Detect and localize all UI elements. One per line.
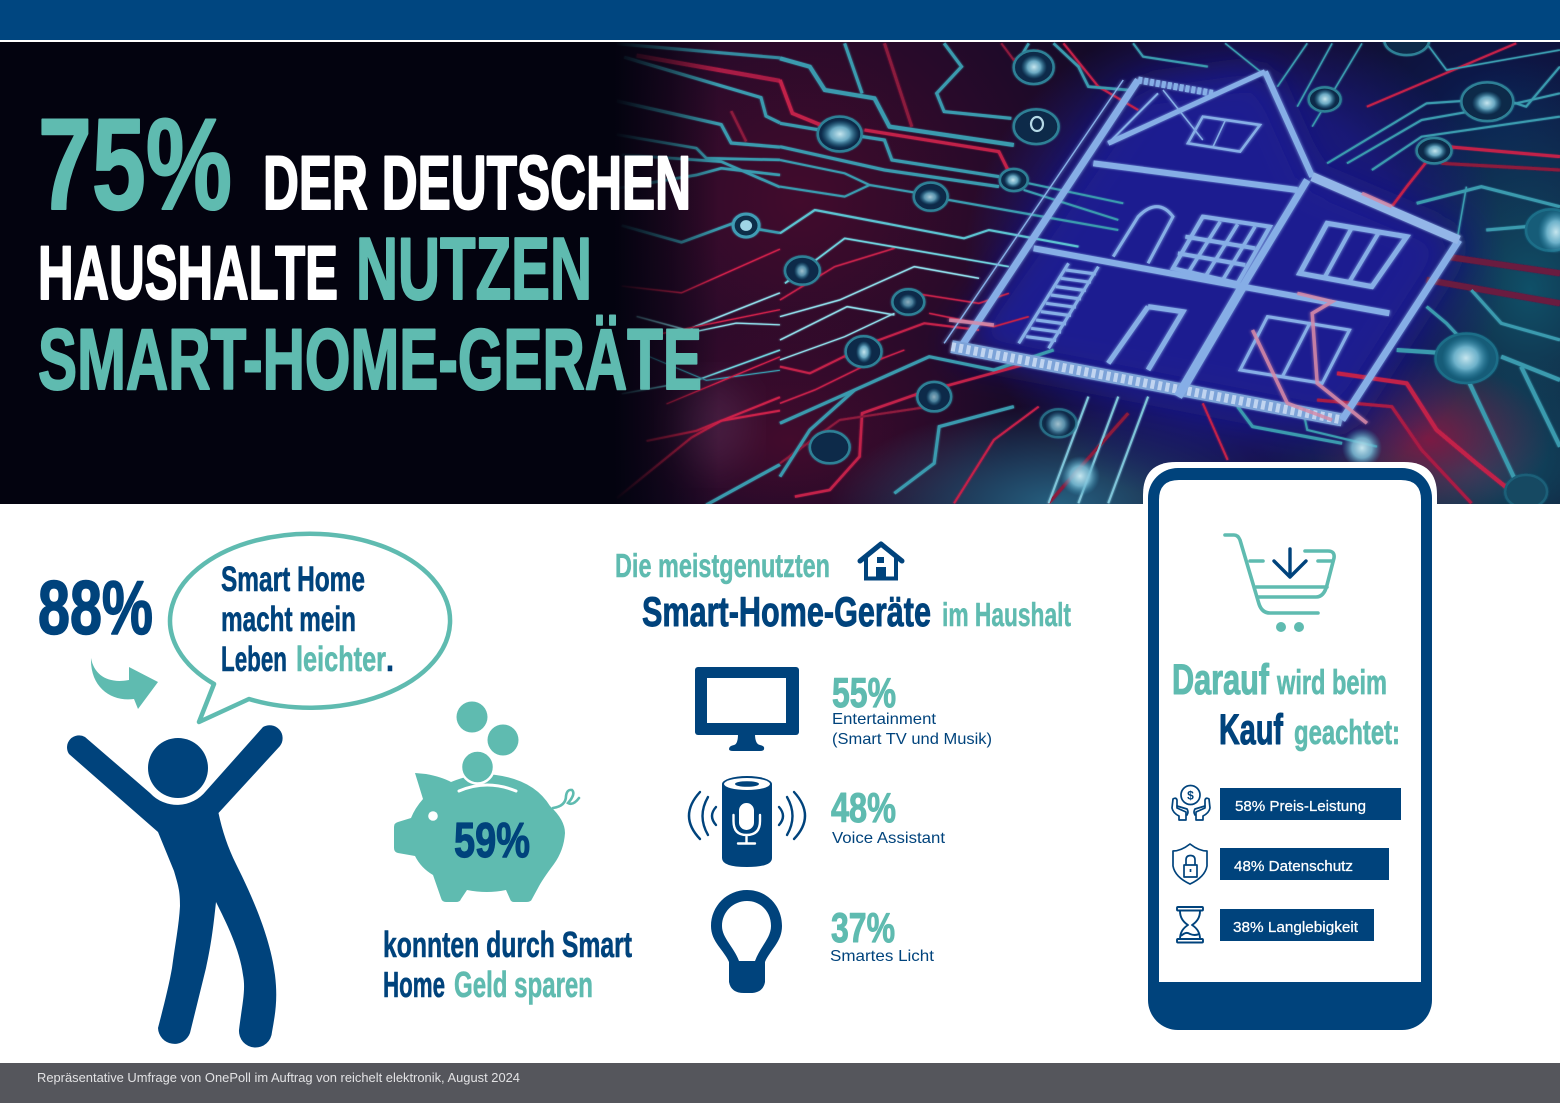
stat: entertainment: (Smart TV und Musik)	[832, 731, 992, 748]
title: nutzen: NUTZEN	[356, 219, 592, 318]
circuit lines left of centre	[617, 44, 780, 505]
teal traces	[780, 43, 1560, 503]
bubble text: Leben	[221, 640, 287, 679]
stat: entertainment: Entertainment	[832, 711, 937, 728]
speech bubble	[170, 534, 450, 722]
icon: light bulb	[711, 890, 782, 993]
stat: voice assistant: Voice Assistant	[832, 830, 946, 847]
stat: voice assistant	[831, 784, 946, 847]
icon: hands with coin	[1172, 786, 1210, 820]
coin entering slot	[461, 750, 494, 784]
savings text	[383, 924, 632, 1005]
bar: privacy: 48% Datenschutz	[1234, 858, 1353, 875]
stat: voice assistant: 48%	[831, 784, 896, 831]
hero colour glows	[651, 42, 1560, 504]
phone body	[1148, 468, 1432, 1030]
bar: price: 58% Preis-Leistung	[1235, 798, 1366, 815]
phone heading: Darauf	[1172, 656, 1269, 704]
phone panel	[1143, 462, 1437, 1030]
icon: shopping cart	[1225, 535, 1334, 632]
stat: smart light: Smartes Licht	[830, 948, 935, 965]
piggy percent: 59%	[454, 814, 530, 868]
circuit node icons	[785, 25, 1560, 508]
piggy tail	[553, 790, 579, 808]
glowing icon centres	[794, 55, 1560, 496]
icon: curved arrow	[91, 658, 158, 709]
phone heading: geachtet:	[1294, 714, 1400, 752]
title: der deutschen: DER DEUTSCHEN	[263, 141, 691, 226]
piggy coin slot	[459, 785, 516, 791]
house blueprint	[944, 72, 1459, 423]
hero panel	[0, 42, 1560, 504]
icon: hourglass	[1177, 907, 1203, 942]
icon: voice assistant	[689, 776, 805, 867]
section heading: devices	[615, 547, 1071, 635]
stat: entertainment: 55%	[832, 669, 896, 716]
phone heading: Kauf	[1219, 706, 1283, 754]
icon: falling coins	[456, 702, 518, 756]
icon: cheering person	[67, 725, 283, 1048]
bar: durability: 38% Langlebigkeit	[1233, 919, 1359, 936]
bar: privacy	[1220, 848, 1389, 880]
top bar	[0, 0, 1560, 40]
bar: durability	[1220, 909, 1374, 941]
blueprint details	[944, 80, 1407, 423]
phone heading: wird beim	[1276, 664, 1387, 702]
stat: smart light	[830, 904, 935, 965]
outer walls and roof	[952, 72, 1459, 420]
bubble text: macht mein	[221, 600, 356, 639]
section heading: devices: Smart-Home-Geräte	[642, 588, 931, 635]
stairs	[1019, 263, 1098, 348]
bar: price	[1220, 788, 1401, 820]
pink wiring over the house	[949, 193, 1392, 423]
section heading: devices: Die meistgenutzten	[615, 547, 830, 584]
section heading: devices: im Haushalt	[942, 596, 1071, 633]
title: 75%: 75%	[38, 91, 232, 237]
bubble text	[221, 560, 394, 679]
bubble text: .	[386, 640, 394, 679]
footer bar	[0, 1063, 1560, 1103]
icon: piggy bank	[394, 750, 579, 902]
footer source note: Repräsentative Umfrage von OnePoll im Auftrag von reichelt elektronik, August 2024	[37, 1071, 520, 1085]
savings text: konnten durch Smart	[383, 924, 632, 965]
phone screen	[1159, 480, 1421, 982]
red traces	[780, 43, 1560, 503]
stat: entertainment	[832, 669, 992, 748]
stat: 88 percent: 88%	[38, 566, 153, 651]
stat: smart light: 37%	[831, 904, 895, 951]
savings text: Home	[383, 964, 445, 1005]
phone heading	[1172, 656, 1400, 754]
hero base colour	[618, 42, 1560, 504]
icon: television	[695, 667, 799, 751]
left fade mask	[0, 42, 719, 504]
title: haushalte: HAUSHALTE	[38, 231, 338, 316]
icon: shield lock	[1173, 844, 1207, 884]
title: smart-home-geraete: SMART-HOME-GERÄTE	[38, 312, 702, 408]
icon: house	[860, 544, 902, 579]
white rule under top bar	[0, 40, 1560, 42]
bubble text: leichter	[296, 640, 386, 679]
bubble outline	[170, 534, 450, 722]
phone white halo	[1143, 462, 1437, 504]
title	[38, 91, 702, 408]
circuit lines	[780, 25, 1560, 508]
savings text: Geld sparen	[454, 964, 593, 1005]
icon: hands with coin: $	[1187, 788, 1194, 802]
bubble text: Smart Home	[221, 560, 365, 599]
piggy eye	[428, 811, 438, 821]
